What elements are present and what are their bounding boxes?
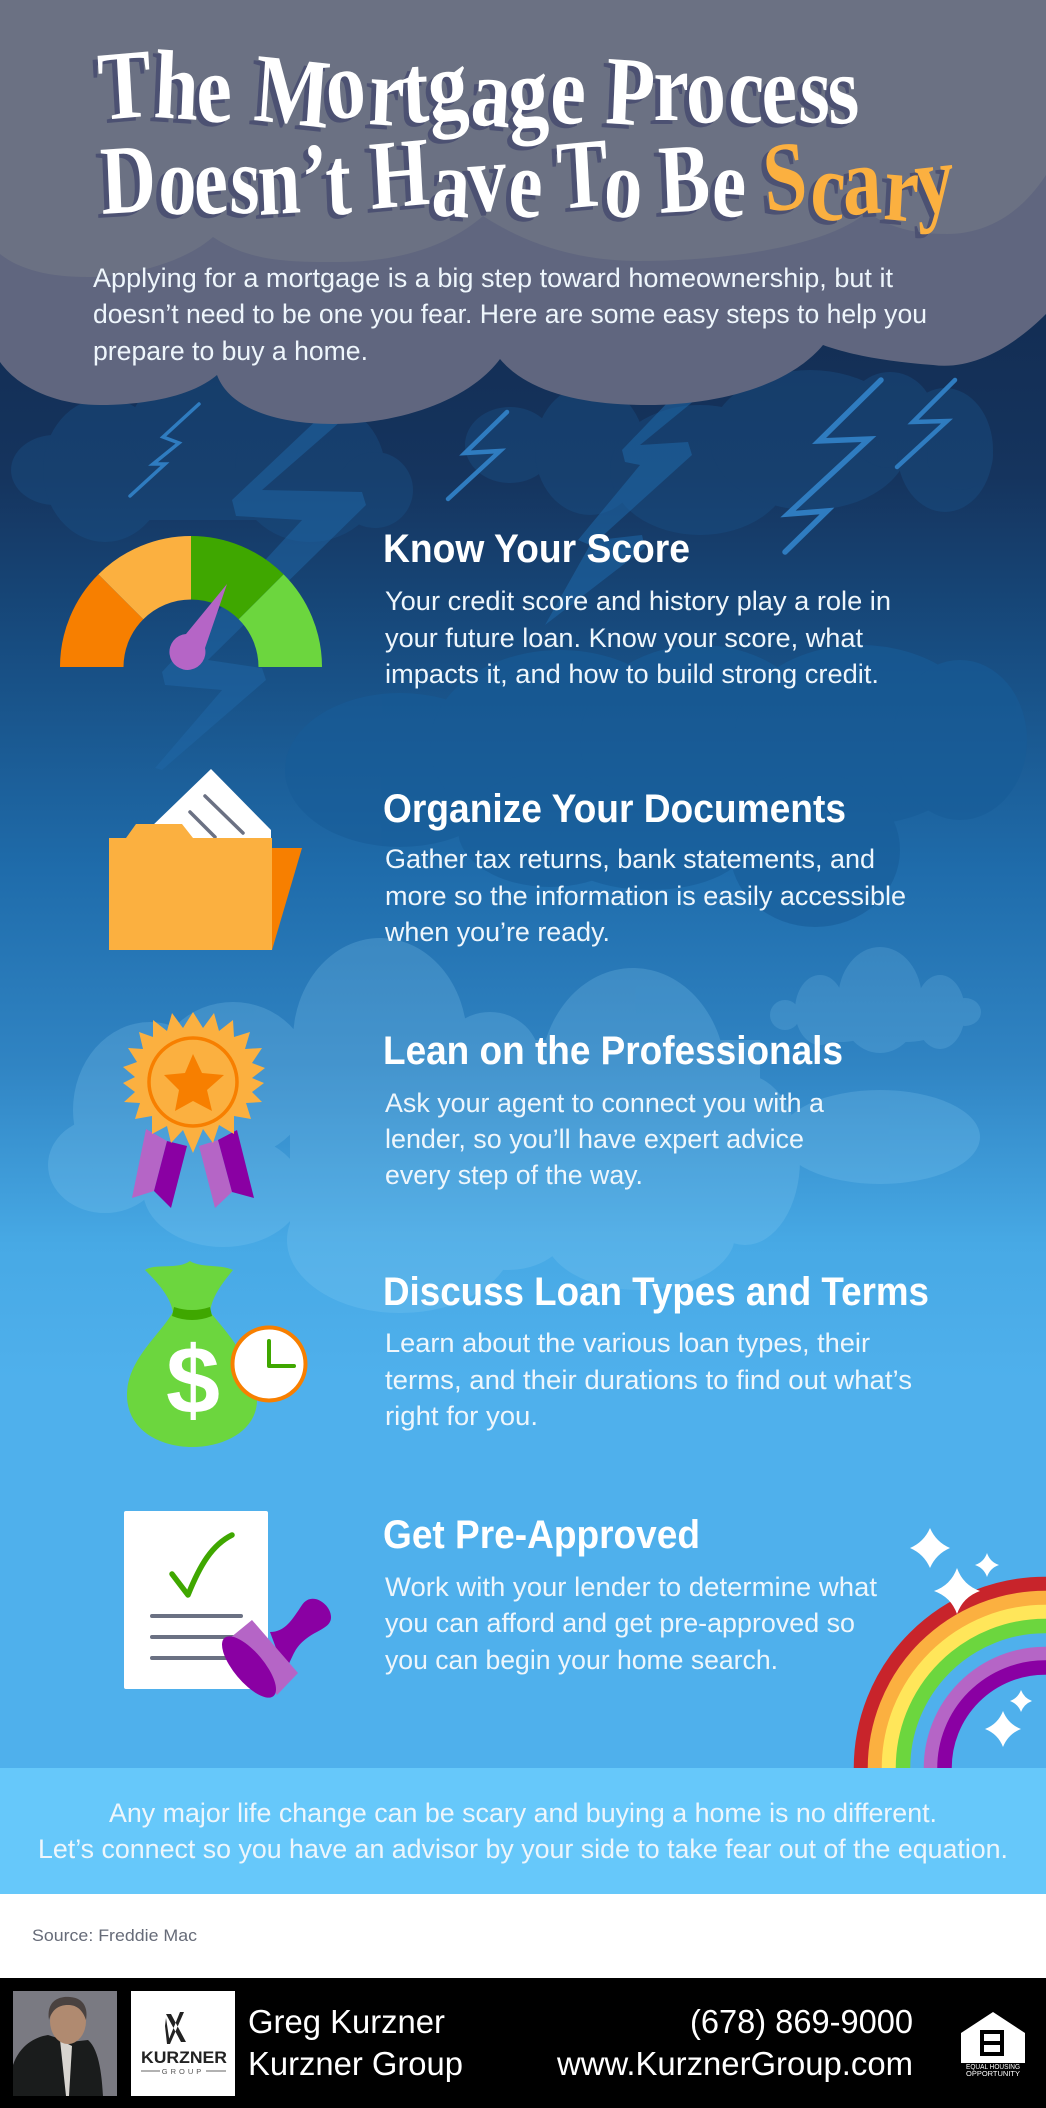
heading and text: lean on the professionals <box>383 1029 843 1190</box>
intro text: Applying for a mortgage is a big step toward homeownership, but it <box>93 263 893 293</box>
brokerage logo: GROUP <box>162 2067 204 2076</box>
background clouds: middle dark <box>285 645 1027 927</box>
title: The Mortgage Process <box>94 30 861 149</box>
heading and text: get pre-approved: Work with your lender to determine what <box>385 1572 878 1602</box>
background clouds: upper dark <box>11 370 993 542</box>
equal housing logo <box>961 2012 1025 2078</box>
icon: money bag with clock <box>127 1261 306 1447</box>
heading and text: know your score: impacts it, and how to build strong credit. <box>385 659 879 689</box>
intro text <box>93 263 927 366</box>
contact names: Greg Kurzner <box>248 2003 445 2040</box>
source note <box>0 1894 1046 1978</box>
equal housing logo: OPPORTUNITY <box>966 2069 1020 2078</box>
lightning: large faded center <box>545 400 695 625</box>
contact names <box>248 2003 463 2082</box>
heading and text: organize your documents: when you’re ready. <box>384 917 610 947</box>
heading and text: organize your documents: more so the information is easily accessible <box>385 881 906 911</box>
storm cloud front layer <box>0 0 1046 277</box>
heading and text: lean on the professionals: Ask your agent to connect you with a <box>385 1088 825 1118</box>
background clouds: small light <box>770 947 981 1053</box>
title: Doesn’t Have To Be <box>97 119 749 240</box>
heading and text: lean on the professionals: every step of the way. <box>385 1160 643 1190</box>
heading and text: get pre-approved: you can begin your home search. <box>385 1645 778 1675</box>
icon: award ribbon <box>123 1012 265 1208</box>
sparkles <box>910 1528 1032 1747</box>
contact names: Kurzner Group <box>248 2045 463 2082</box>
title: Scary <box>757 122 958 243</box>
equal housing logo: EQUAL HOUSING <box>966 2062 1020 2071</box>
heading and text: organize your documents <box>383 787 906 947</box>
agent photo <box>13 1991 117 2096</box>
heading and text: discuss loan types and terms: Learn about the various loan types, their <box>385 1328 870 1358</box>
heading and text: discuss loan types and terms: Discuss Loan Types and Terms <box>383 1270 929 1314</box>
icon: folder with document <box>109 769 302 950</box>
intro text: doesn’t need to be one you fear. Here are some easy steps to help you <box>93 299 927 329</box>
heading and text: get pre-approved: you can afford and get pre-approved so <box>385 1608 855 1638</box>
contact phone and website: www.KurznerGroup.com <box>556 2045 913 2082</box>
intro text: prepare to buy a home. <box>93 336 368 366</box>
icon: money bag with clock: $ <box>166 1327 220 1434</box>
icon: credit score gauge <box>60 536 322 670</box>
heading and text: get pre-approved: Get Pre-Approved <box>383 1513 700 1557</box>
lightning: large faded left <box>155 415 366 770</box>
heading and text: get pre-approved <box>383 1513 878 1675</box>
contact phone and website <box>556 2003 913 2082</box>
brokerage logo <box>131 1991 235 2096</box>
contact phone and website: (678) 869-9000 <box>690 2003 913 2040</box>
heading and text: lean on the professionals: lender, so you’ll have expert advice <box>385 1124 804 1154</box>
heading and text: organize your documents: Organize Your Documents <box>383 787 846 831</box>
heading and text: discuss loan types and terms: right for you. <box>385 1401 538 1431</box>
rainbow <box>861 1584 1046 1952</box>
heading and text: know your score: Know Your Score <box>383 527 690 571</box>
heading and text: know your score <box>383 527 891 689</box>
title <box>94 30 958 243</box>
brokerage logo: KURZNER <box>141 2048 227 2067</box>
heading and text: know your score: your future loan. Know your score, what <box>385 623 863 653</box>
closing callout band: Let’s connect so you have an advisor by your side to take fear out of the equation. <box>38 1834 1008 1864</box>
heading and text: know your score: Your credit score and history play a role in <box>385 586 891 616</box>
storm cloud back layer <box>0 0 1046 424</box>
heading and text: organize your documents: Gather tax returns, bank statements, and <box>385 844 875 874</box>
footer bar <box>0 1978 1046 2108</box>
background clouds: large light <box>48 938 980 1313</box>
lightning: small bolts <box>130 380 955 552</box>
source note: Source: Freddie Mac <box>32 1927 197 1945</box>
closing callout band: Any major life change can be scary and buying a home is no different. <box>109 1798 937 1828</box>
heading and text: discuss loan types and terms: terms, and their durations to find out what’s <box>385 1365 912 1395</box>
sky background <box>0 250 1046 1380</box>
heading and text: discuss loan types and terms <box>383 1270 929 1431</box>
heading and text: lean on the professionals: Lean on the Professionals <box>383 1029 843 1073</box>
icon: approved document with stamp <box>124 1511 331 1706</box>
closing callout band <box>0 1768 1046 1894</box>
